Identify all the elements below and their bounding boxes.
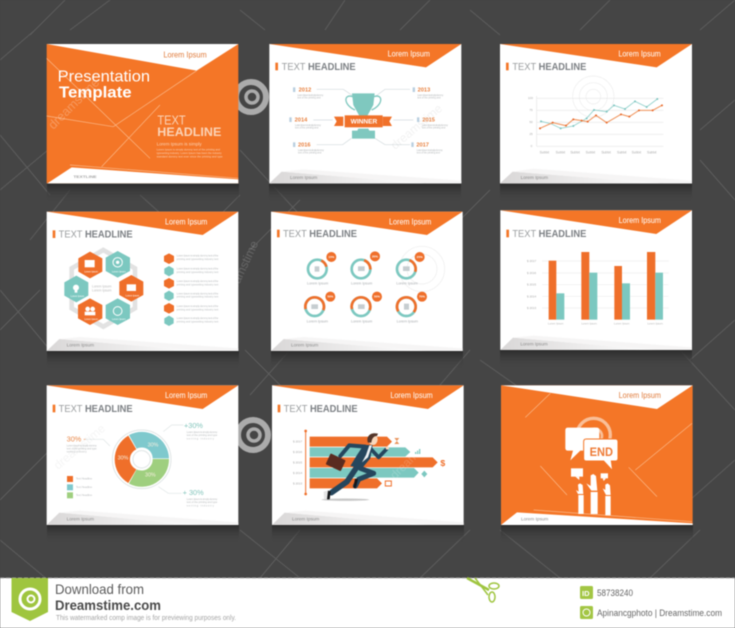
- footer text: Lorem Ipsum: [521, 516, 548, 522]
- hexagon cycle: [64, 250, 143, 327]
- arrow chart: $ 2015: [293, 461, 302, 465]
- callouts: Lorem Ipsum is simply dummy: [187, 497, 218, 501]
- scissors icon: [467, 578, 499, 602]
- cover headline: TEXT: [157, 113, 186, 127]
- donut icons: [311, 266, 410, 310]
- hexagon list: printing and typesetting industry text: [177, 257, 219, 261]
- line chart: Subtxt: [632, 150, 641, 154]
- cover headline: [157, 113, 223, 158]
- legend: Text Headline: [76, 493, 93, 497]
- hexagon cycle: Lorem Ipsum: [71, 295, 84, 298]
- footer band: [271, 339, 427, 351]
- donut chart: 30%: [118, 455, 129, 461]
- credit: Apinancgphoto | Dreamstime.com: [597, 608, 722, 618]
- donut labels: Lorem Ipsum: [397, 319, 418, 323]
- badge values: 15%: [328, 255, 335, 259]
- line chart: 50: [529, 120, 533, 124]
- heading: TEXT HEADLINE: [512, 229, 587, 240]
- donut labels: Lorem Ipsum: [396, 281, 418, 285]
- panel: end slide: [501, 385, 693, 525]
- panel: winner timeline slide: text of the printing and: [422, 126, 446, 130]
- header label: Lorem Ipsum: [165, 391, 208, 400]
- badge values: 50%: [374, 295, 380, 299]
- donut labels: [307, 281, 418, 323]
- badge values: [327, 254, 425, 299]
- header band: [271, 212, 463, 235]
- panel: winner timeline slide: text of the printing and: [417, 96, 441, 100]
- footer band: [47, 513, 203, 525]
- watermark wordmarks: dreamstime: [51, 421, 108, 472]
- callouts: 30% -: [67, 434, 86, 443]
- timeline entries: 2013: [418, 88, 430, 94]
- footer band: [47, 339, 203, 351]
- END label: END: [590, 445, 613, 459]
- footer text: Lorem Ipsum: [67, 517, 94, 523]
- watermark spiral left of top row: [236, 82, 266, 112]
- panel: winner timeline slide: Lorem Ipsum is simply dummy: [297, 93, 324, 97]
- timeline entries: 2016: [298, 143, 311, 149]
- download text: Download from: [55, 581, 144, 597]
- line chart: Subtxt: [617, 150, 626, 154]
- cover title: Presentation: [58, 69, 150, 86]
- trophy: WINNER: [351, 119, 378, 125]
- hexagon icons: [73, 258, 136, 315]
- heading: TEXT HEADLINE: [59, 230, 133, 241]
- bottom white band: [501, 512, 693, 525]
- bar chart: Lorem Ipsum: [647, 322, 664, 326]
- header label: Lorem Ipsum: [619, 391, 661, 400]
- donut grid: [303, 246, 445, 319]
- panel: winner timeline slide: Lorem Ipsum is simply dummy: [298, 148, 325, 152]
- disclaimer: This watermarked comp image is for previewing purposes only.: [56, 615, 236, 622]
- arrow chart: $ 2016: [293, 450, 302, 454]
- line chart: Subtxt: [540, 150, 549, 154]
- donut labels: Lorem Ipsum: [351, 319, 372, 323]
- footer text: Lorem Ipsum: [292, 517, 319, 523]
- bar chart: $ 2017: [527, 259, 536, 263]
- donut labels: Lorem Ipsum: [307, 319, 328, 323]
- hexagon cycle: Lorem Ipsum: [84, 271, 98, 274]
- image id: [580, 586, 633, 599]
- line chart: 75: [529, 108, 533, 112]
- watermark wordmarks: dreamstime: [388, 101, 445, 152]
- slide shadows: [47, 184, 693, 543]
- footer band: [269, 172, 427, 183]
- panel: winner timeline slide: text of the printing and: [298, 151, 322, 155]
- cover top white band: [47, 44, 238, 71]
- footer band: [272, 513, 429, 525]
- header band: [269, 44, 461, 67]
- panel: bar chart slide: [500, 210, 692, 350]
- watermark wordmarks: [51, 101, 445, 482]
- running businessman: [321, 433, 389, 501]
- donut chart: 30%: [148, 443, 159, 449]
- header band: [500, 210, 692, 234]
- callouts: Lorem Ipsum is simply dummy: [67, 444, 97, 448]
- legend: [67, 476, 93, 498]
- image id: ID: [582, 589, 590, 598]
- callouts: +30%: [184, 421, 203, 430]
- cover bottom white band: [47, 167, 238, 183]
- header band: [47, 385, 238, 409]
- line chart: 0: [531, 144, 533, 148]
- watermark wordmarks: dreamstime: [387, 428, 442, 482]
- timeline entries: 2015: [422, 118, 435, 124]
- callouts: Lorem Ipsum is simply dummy: [187, 430, 218, 434]
- image id: 58738240: [597, 588, 633, 598]
- watermark spiral left of bottom row: [238, 420, 268, 450]
- legend: Text Headline: [76, 485, 93, 489]
- donut labels: Lorem Ipsum: [351, 281, 372, 285]
- hexagon cycle: Lorem Ipsum: [92, 285, 112, 289]
- heading: TEXT HEADLINE: [282, 62, 356, 73]
- watermark spiral: [577, 418, 610, 452]
- cover watermark text: dreamstime: [46, 75, 102, 132]
- panel: hexagon slide: [47, 212, 238, 351]
- header label: Lorem Ipsum: [389, 217, 432, 226]
- watermark wordmarks: dreamstime: [222, 238, 261, 301]
- line chart: Subtxt: [556, 150, 565, 154]
- trophy: [334, 93, 392, 139]
- callouts: + 30%: [183, 488, 204, 497]
- bar chart: $ 2015: [527, 283, 536, 287]
- donut labels: Lorem Ipsum: [307, 281, 328, 285]
- badge values: 25%: [417, 255, 423, 259]
- panel: winner timeline slide: Lorem Ipsum is simply dummy: [417, 93, 444, 97]
- footer text: Lorem Ipsum: [521, 175, 548, 181]
- panel: winner timeline slide: [269, 44, 461, 183]
- panel: winner timeline slide: text of the printing and: [297, 96, 321, 100]
- bar chart: $ 2013: [527, 306, 536, 310]
- callouts: text of the printing and type: [67, 447, 97, 451]
- hexagon list: Lorem Ipsum is simply dummy text of the: [177, 291, 219, 295]
- badge values: 70%: [419, 295, 425, 299]
- hexagon cycle: Lorem Ipsum: [112, 318, 126, 321]
- hexagon list: printing and typesetting industry text: [177, 282, 219, 286]
- header band: [272, 385, 464, 409]
- bar chart: Lorem Ipsum: [548, 322, 564, 326]
- hexagon list: printing and typesetting industry text: [177, 307, 219, 311]
- badge values: 50%: [327, 295, 334, 299]
- logo shield: [12, 578, 48, 621]
- panel: winner timeline slide: Lorem Ipsum is simply dummy: [422, 123, 449, 127]
- footer band: [500, 338, 657, 350]
- legend: Text Headline: [76, 477, 93, 481]
- raised hands: [576, 474, 611, 515]
- donut chart: [112, 430, 171, 489]
- brand text: Dreamstime.com: [55, 597, 161, 613]
- line chart: 100: [528, 96, 533, 100]
- line chart: 25: [529, 132, 533, 136]
- callouts: setting industry: [67, 450, 87, 454]
- footer strip: [0, 578, 735, 628]
- callouts: setting industry: [187, 503, 215, 507]
- bar chart: Lorem Ipsum: [614, 322, 630, 326]
- timeline entries: 2014: [295, 118, 308, 124]
- header label: Lorem Ipsum: [388, 49, 430, 58]
- hexagon list: Lorem Ipsum is simply dummy text of the: [177, 254, 219, 258]
- header label: Lorem Ipsum: [619, 216, 661, 225]
- bar chart: $ 2014: [527, 294, 536, 298]
- hexagon list: printing and typesetting industry text: [177, 320, 219, 324]
- badge values: 20%: [372, 254, 378, 258]
- heading: TEXT HEADLINE: [284, 404, 358, 415]
- cover headline: standard dummy text ever since the printing and type: [157, 154, 223, 158]
- header label: Lorem Ipsum: [618, 49, 661, 58]
- bar chart: [527, 252, 669, 326]
- header label: Lorem Ipsum: [165, 217, 208, 226]
- hexagon list: [164, 253, 219, 326]
- panel: line chart slide: [500, 44, 692, 183]
- callouts: [67, 421, 218, 507]
- panel: donut stats slide: [271, 212, 463, 351]
- cover title: Template: [59, 85, 132, 102]
- panel: winner timeline slide: Lorem Ipsum is simply dummy: [417, 148, 443, 152]
- footer text: Lorem Ipsum: [290, 175, 317, 181]
- cover label: Lorem Ipsum: [163, 50, 207, 59]
- hexagon list: printing and typesetting industry text: [177, 270, 219, 274]
- bar chart: Lorem Ipsum: [581, 322, 598, 326]
- heading: TEXT HEADLINE: [512, 62, 587, 73]
- cover headline: Lorem Ipsum is simply: [157, 142, 202, 147]
- line chart: Subtxt: [586, 150, 595, 154]
- cover headline: HEADLINE: [157, 125, 221, 139]
- panel: winner timeline slide: text of the printing and: [417, 151, 440, 155]
- callouts: setting industry: [187, 436, 215, 440]
- line chart: Subtxt: [647, 150, 656, 154]
- panel: winner timeline slide: Lorem Ipsum is simply dummy: [295, 123, 322, 127]
- footer text: Lorem Ipsum: [291, 343, 318, 349]
- hexagon list: Lorem Ipsum is simply dummy text of the: [177, 316, 219, 320]
- timeline entries: [295, 88, 435, 149]
- arrow chart: [293, 430, 438, 495]
- line chart: [528, 76, 663, 154]
- header band: [47, 212, 238, 235]
- hexagon list: Lorem Ipsum is simply dummy text of the: [177, 279, 219, 283]
- hexagon list: Lorem Ipsum is simply dummy text of the: [177, 304, 219, 308]
- arrow chart: $ 2013: [293, 482, 302, 486]
- arrow chart: $ 2017: [293, 439, 302, 443]
- arrow chart: $ 2014: [293, 471, 302, 475]
- footer text: Lorem Ipsum: [520, 342, 548, 348]
- arrow icons: [385, 438, 445, 486]
- hexagon cycle: Lorem Ipsum: [112, 270, 126, 273]
- callouts: text of the printing and type: [187, 500, 218, 504]
- footer band: [500, 172, 663, 183]
- cover headline: Lorem Ipsum is simply dummy text of the printing and: [157, 148, 221, 152]
- timeline entries: 2017: [416, 143, 429, 149]
- donut chart: 30%: [145, 473, 156, 479]
- credit: [580, 606, 722, 619]
- line chart: Subtxt: [570, 150, 580, 154]
- hexagon cycle: Lorem Ipsum: [92, 289, 112, 293]
- donut badges: [325, 251, 427, 302]
- footer text: Lorem Ipsum: [67, 343, 94, 349]
- hexagon cycle: Lorem Ipsum: [84, 318, 98, 321]
- panel: winner timeline slide: text of the printing and: [295, 126, 319, 130]
- cover headline: typesetting industry. Lorem Ipsum has been the industry: [157, 151, 222, 155]
- cover footer label: TEXTLINE: [73, 174, 97, 179]
- panel: runner slide: [272, 385, 464, 525]
- hexagon list: printing and typesetting industry text: [177, 295, 219, 299]
- arrow icons: $: [440, 458, 445, 468]
- hexagon cycle: Lorem Ipsum: [126, 295, 139, 298]
- header label: Lorem Ipsum: [390, 391, 433, 400]
- heading: TEXT HEADLINE: [59, 404, 133, 415]
- header band: [500, 44, 692, 67]
- heading: TEXT HEADLINE: [283, 229, 357, 240]
- top white band: [501, 385, 693, 409]
- panel: pie slide: [47, 385, 238, 525]
- callouts: text of the printing and type: [187, 433, 218, 437]
- timeline entries: 2012: [299, 88, 311, 94]
- speech bubbles: [565, 428, 618, 481]
- hexagon list: Lorem Ipsum is simply dummy text of the: [177, 266, 219, 270]
- cover title: [58, 69, 150, 102]
- panel: cover slide: [46, 44, 238, 183]
- line chart: Subtxt: [601, 150, 611, 154]
- bar chart: $ 2016: [527, 271, 536, 275]
